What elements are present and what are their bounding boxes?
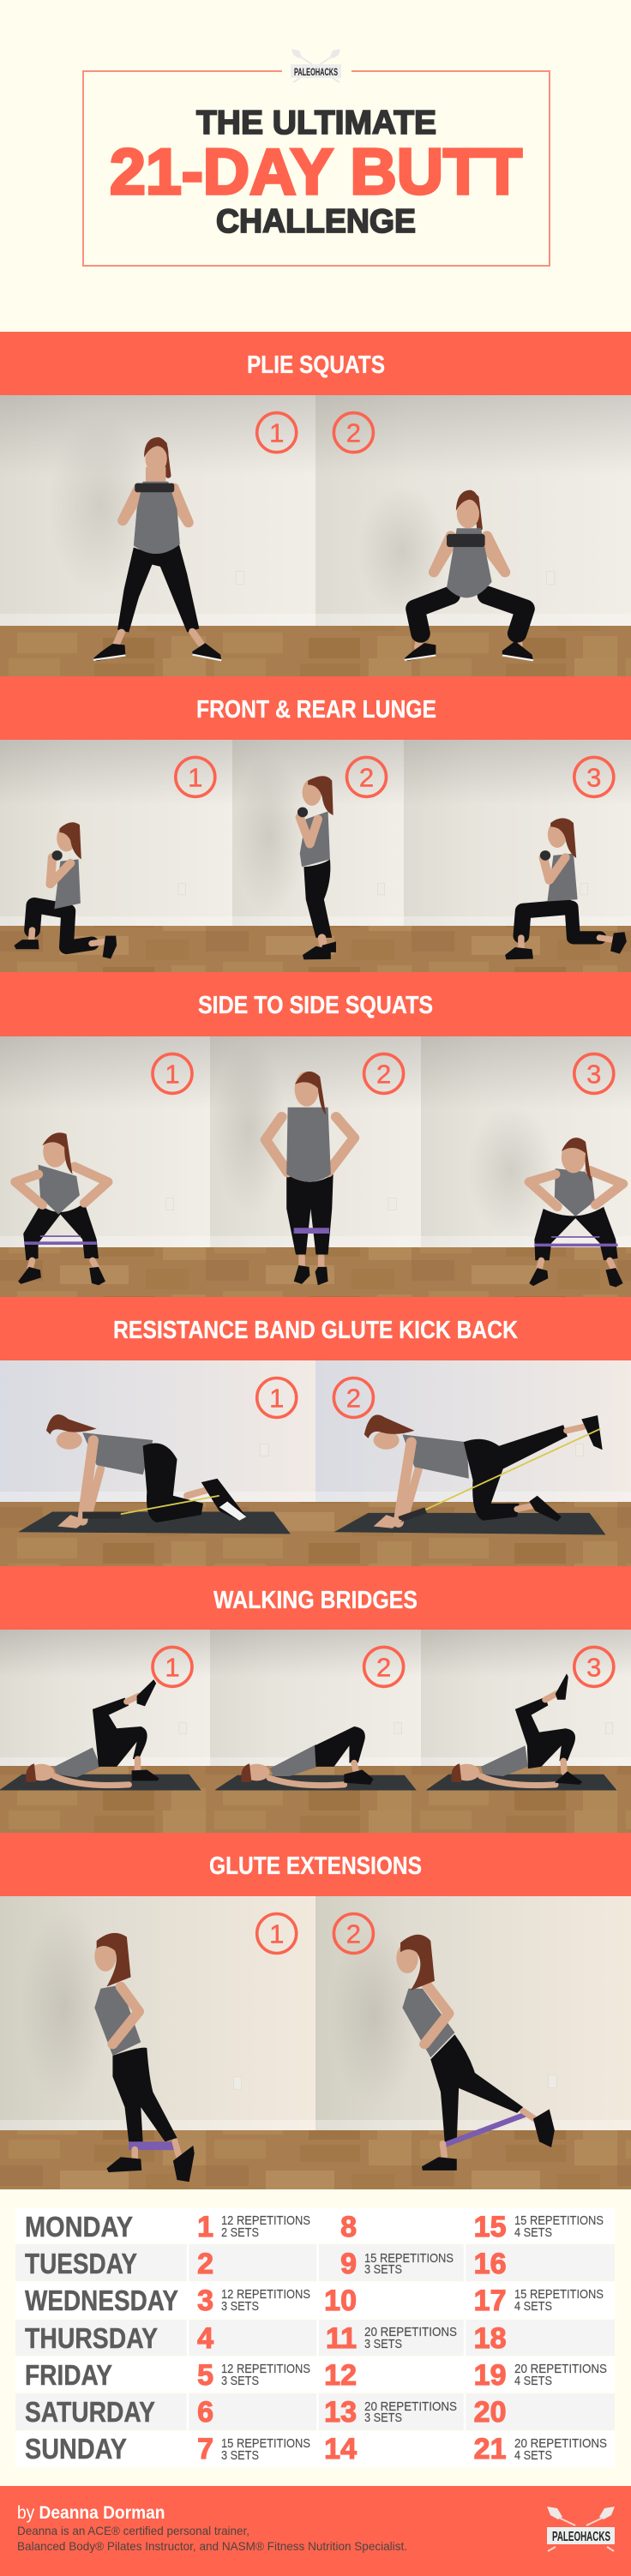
week 1 column: 5 [197,2359,213,2392]
title line 2: 21-DAY BUTT [110,135,522,207]
step number 2 [334,413,373,453]
panel: plie squats [0,332,631,676]
photo: lunge step 3 [404,740,631,973]
logo: paleohacks footer [547,2507,615,2551]
week 1 column: 12 REPETITIONS [221,2362,310,2376]
title block [83,49,550,266]
week 2 column: 20 REPETITIONS [364,2399,457,2414]
step number 1 [153,1647,192,1686]
week 3 column: 17 [474,2285,506,2317]
heading band: plie squats [0,332,631,395]
panel: side to side squats [0,972,631,1297]
author bio: Balanced Body® Pilates Instructor, and NASM® Fitness Nutrition Specialist. [17,2539,407,2553]
step number 2 [364,1054,404,1093]
day labels: THURSDAY [25,2323,158,2355]
photo: lunge step 1 [0,740,232,973]
week 1 column: 3 SETS [221,2299,259,2314]
step number 2: 2 [346,1918,361,1949]
photo: plie squat step 2 [316,395,631,676]
week 3 column: 15 REPETITIONS [514,2213,604,2228]
heading band: front and rear lunge [0,676,631,740]
author name: by Deanna Dorman [17,2503,165,2523]
week 2 column: 13 [324,2396,357,2429]
heading band: plie squats: PLIE SQUATS [247,351,385,379]
heading band: walking bridges [0,1566,631,1630]
week 2 column: 3 SETS [364,2411,402,2425]
logo: paleohacks top: PALEOHACKS [294,66,338,78]
week 2 column: 3 SETS [364,2337,402,2351]
week 2 column: 11 [326,2322,357,2355]
logo: paleohacks top [291,49,341,82]
schedule table [15,2208,615,2467]
title line 3: CHALLENGE [216,203,416,240]
week 2 column: 12 [324,2359,357,2392]
step number 1 [257,1913,297,1953]
step number 2: 2 [376,1652,391,1682]
step number 1 [153,1054,192,1093]
panel: front and rear lunge [0,676,631,973]
photo: glute extension step 2 [316,1896,631,2189]
week 3 column: 16 [474,2248,506,2280]
week 3 column: 19 [474,2359,506,2392]
week 1 column: 2 SETS [221,2225,259,2240]
week 3 column: 21 [474,2433,506,2465]
step number 1: 1 [188,762,202,792]
step number 2 [334,1378,373,1418]
week 1 column: 2 [197,2248,213,2280]
week 2 column: 9 [340,2248,357,2280]
step number 3: 3 [586,762,601,792]
week 2 column: 8 [340,2211,357,2243]
author bio [17,2524,407,2553]
step number 1 [257,413,297,453]
step number 2: 2 [376,1059,391,1089]
heading band: side to side squats [0,972,631,1036]
week 1 column: 6 [197,2396,213,2429]
week 1 column: 1 [197,2211,213,2243]
panel: glute extensions [0,1833,631,2189]
week 1 column [197,2211,310,2465]
week 2 column: 15 REPETITIONS [364,2251,454,2266]
week 1 column: 12 REPETITIONS [221,2213,310,2228]
week 3 column: 20 REPETITIONS [514,2362,607,2376]
step number 2: 2 [346,1383,361,1413]
heading band: glute extensions: GLUTE EXTENSIONS [209,1852,422,1880]
week 2 column: 14 [324,2433,357,2465]
week 1 column: 3 SETS [221,2448,259,2463]
heading band: resistance band glute kick back [0,1297,631,1360]
step number 3 [574,757,614,796]
photo: kick back step 2 [316,1360,631,1566]
step number 1: 1 [269,1383,284,1413]
step number 1: 1 [165,1652,180,1682]
week 3 column: 4 SETS [514,2374,552,2388]
panel: walking bridges [0,1566,631,1833]
day labels: TUESDAY [25,2249,137,2280]
photo: plie squat step 1 [0,395,316,676]
photo: side squat step 1 [0,1036,210,1297]
week 3 column: 15 [474,2211,506,2243]
week 2 column: 3 SETS [364,2262,402,2277]
step number 1 [176,757,215,796]
week 1 column: 12 REPETITIONS [221,2287,310,2302]
week 2 column: 20 REPETITIONS [364,2325,457,2339]
heading band: glute extensions [0,1833,631,1896]
step number 1: 1 [269,1918,284,1949]
photo: side squat step 2 [210,1036,421,1297]
week 3 column: 20 REPETITIONS [514,2436,607,2451]
heading band: resistance band glute kick back: RESISTANCE BAND GLUTE KICK BACK [113,1317,518,1344]
photo: bridge step 3 [421,1630,631,1833]
step number 1 [257,1378,297,1418]
heading band: front and rear lunge: FRONT & REAR LUNGE [196,696,436,724]
step number 2: 2 [359,762,374,792]
week 3 column: 4 SETS [514,2299,552,2314]
photo: lunge step 2 [232,740,404,973]
week 3 column: 20 [474,2396,506,2429]
heading band: walking bridges: WALKING BRIDGES [213,1587,418,1614]
table rows background [15,2208,615,2467]
photo: kick back step 1 [0,1360,316,1566]
day labels: SUNDAY [25,2434,127,2465]
day labels: MONDAY [25,2212,133,2243]
week 1 column: 15 REPETITIONS [221,2436,310,2451]
week 2 column [324,2211,457,2465]
step number 2 [364,1647,404,1686]
week 1 column: 3 SETS [221,2374,259,2388]
title frame [83,71,550,266]
step number 3: 3 [586,1652,601,1682]
author bio: Deanna is an ACE® certified personal trainer, [17,2524,249,2537]
title line 1: THE ULTIMATE [196,105,436,141]
week 3 column: 18 [474,2322,506,2355]
panel: resistance band glute kick back [0,1297,631,1566]
week 1 column: 7 [197,2433,213,2465]
photo: side squat step 3 [421,1036,631,1297]
step number 2 [346,757,386,796]
week 1 column: 3 [197,2285,213,2317]
week 3 column [474,2211,607,2465]
week 3 column: 4 SETS [514,2225,552,2240]
day labels: SATURDAY [25,2397,155,2429]
week 1 column: 4 [197,2322,213,2355]
day labels: WEDNESDAY [25,2285,178,2317]
day labels: FRIDAY [25,2360,112,2392]
day labels [25,2212,178,2465]
step number 2: 2 [346,418,361,447]
step number 3: 3 [586,1059,601,1089]
photo: bridge step 1 [0,1630,210,1833]
step number 1: 1 [269,418,284,447]
step number 2 [334,1913,373,1953]
week 3 column: 15 REPETITIONS [514,2287,604,2302]
week 3 column: 4 SETS [514,2448,552,2463]
week 2 column: 10 [324,2285,357,2317]
photo: glute extension step 1 [0,1896,316,2189]
footer [0,2486,631,2576]
step number 1: 1 [165,1059,180,1089]
step number 3 [574,1647,614,1686]
photo: bridge step 2 [210,1630,421,1833]
heading band: side to side squats: SIDE TO SIDE SQUATS [198,992,433,1019]
step number 3 [574,1054,614,1093]
